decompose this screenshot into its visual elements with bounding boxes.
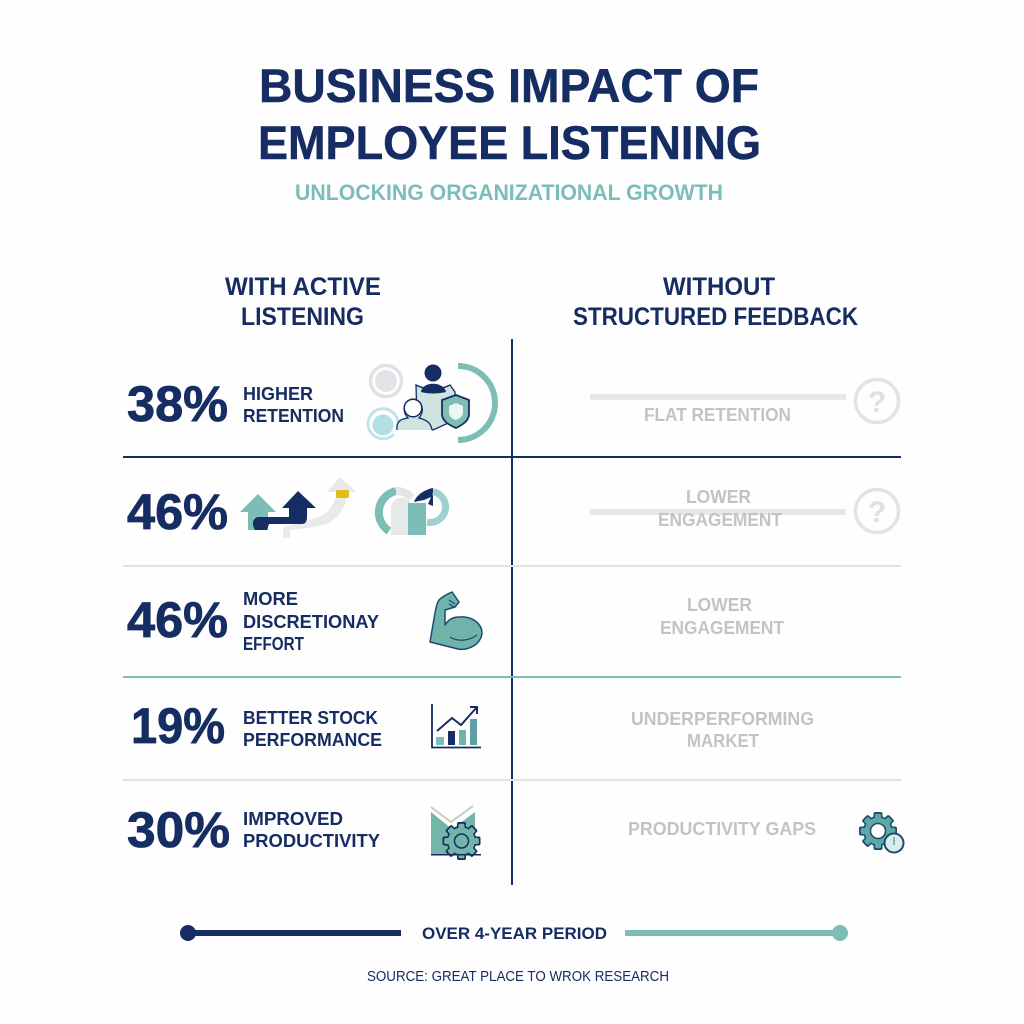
title	[258, 59, 761, 169]
column heading: without structured feedback: STRUCTURED FEEDBACK	[573, 303, 858, 331]
row 1: 38% higher retention	[127, 376, 344, 432]
row 4: underperforming market: MARKET	[687, 730, 760, 751]
icon: bar chart with arrow	[432, 704, 481, 748]
row 1: flat retention	[590, 394, 846, 425]
column heading: with active listening: WITH ACTIVE	[225, 273, 381, 301]
row 3: lower engagement: ENGAGEMENT	[660, 617, 785, 638]
column heading: with active listening	[225, 273, 381, 331]
timeline: over 4-year period	[180, 924, 848, 943]
icon: ring chart	[379, 488, 446, 535]
row 1: 38% higher retention: HIGHER	[243, 383, 313, 404]
row 4: underperforming market	[631, 708, 814, 751]
row 2: lower engagement	[590, 486, 846, 530]
icon: question mark	[856, 490, 898, 532]
row 3: lower engagement	[660, 594, 785, 638]
row 2: 46%: 46%	[127, 484, 228, 540]
row 3: lower engagement: LOWER	[687, 594, 752, 615]
row 2: lower engagement: LOWER	[686, 486, 751, 507]
row 3: 46% more discretionay effort: 46%	[127, 592, 228, 648]
row 5: 30% improved productivity	[127, 802, 381, 858]
title: BUSINESS IMPACT OF	[259, 59, 759, 112]
icon: flexed arm	[430, 592, 482, 649]
row 4: 19% better stock performance: 19%	[131, 698, 225, 754]
row 1: 38% higher retention: RETENTION	[243, 405, 344, 426]
column heading: without structured feedback	[573, 273, 858, 331]
icon: gear with clock	[859, 812, 904, 852]
icon: question mark: ?	[868, 496, 886, 529]
row 4: 19% better stock performance	[131, 698, 382, 754]
column heading: with active listening: LISTENING	[241, 303, 364, 331]
timeline: over 4-year period: OVER 4-YEAR PERIOD	[422, 924, 607, 943]
row 4: underperforming market: UNDERPERFORMING	[631, 708, 814, 729]
row 4: 19% better stock performance: PERFORMANCE	[243, 729, 382, 750]
column heading: without structured feedback: WITHOUT	[663, 273, 775, 301]
icon: question mark	[856, 380, 898, 422]
row dividers	[123, 456, 901, 781]
icon: envelope with gear	[431, 806, 481, 860]
row 3: 46% more discretionay effort: DISCRETIONAY	[243, 611, 380, 632]
row 4: 19% better stock performance: BETTER STOCK	[243, 707, 379, 728]
icon: people and shield	[368, 364, 495, 440]
row 5: 30% improved productivity: PRODUCTIVITY	[243, 830, 381, 851]
row 3: 46% more discretionay effort: MORE	[243, 588, 298, 609]
row 2: lower engagement: ENGAGEMENT	[658, 509, 783, 530]
title: EMPLOYEE LISTENING	[258, 116, 761, 169]
icon: question mark: ?	[868, 386, 886, 419]
row 5: productivity gaps: PRODUCTIVITY GAPS	[628, 818, 816, 839]
source: SOURCE: GREAT PLACE TO WROK RESEARCH	[367, 969, 669, 985]
icon: rising arrows	[240, 477, 356, 538]
row 5: 30% improved productivity: 30%	[127, 802, 230, 858]
row 3: 46% more discretionay effort	[127, 588, 380, 654]
central vertical divider	[511, 339, 513, 885]
row 1: 38% higher retention: 38%	[127, 376, 228, 432]
row 5: 30% improved productivity: IMPROVED	[243, 808, 343, 829]
row 1: flat retention: FLAT RETENTION	[644, 404, 791, 425]
subtitle: UNLOCKING ORGANIZATIONAL GROWTH	[295, 180, 723, 205]
row 3: 46% more discretionay effort: EFFORT	[243, 633, 305, 654]
